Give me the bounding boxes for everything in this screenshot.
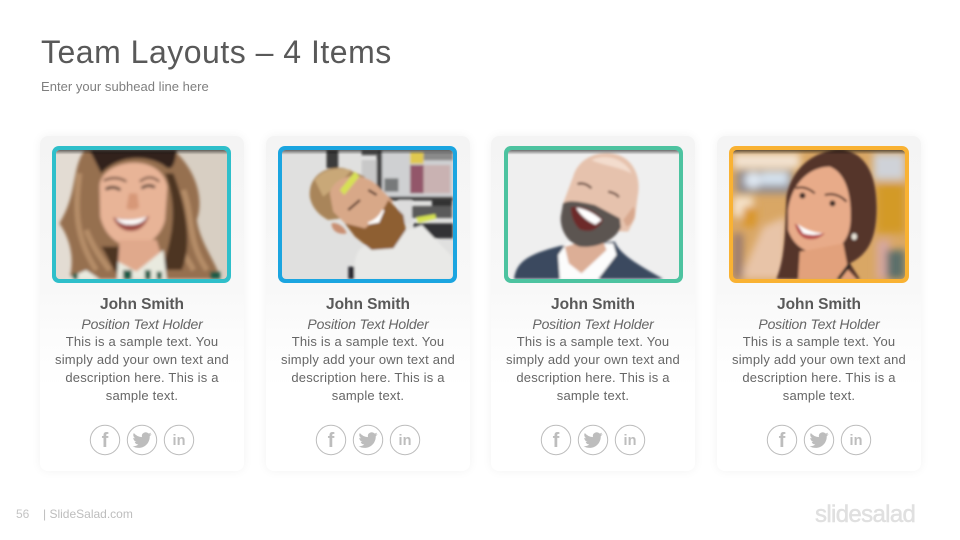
social icons (90, 424, 194, 456)
panel: team member 2 (266, 136, 470, 471)
social icons: in (399, 433, 411, 449)
social icons: in (624, 433, 636, 449)
panel: team member 3 (491, 136, 695, 471)
title: Team Layouts – 4 Items (41, 34, 392, 70)
name: John Smith (551, 296, 635, 313)
social icons: f (328, 430, 335, 452)
description: simply add your own text and (732, 352, 906, 367)
position: Position Text Holder (758, 316, 880, 332)
position: Position Text Holder (81, 316, 203, 332)
subhead: Enter your subhead line here (41, 79, 209, 94)
social icons (766, 424, 872, 456)
name: John Smith (326, 296, 410, 313)
social icons: f (553, 430, 560, 452)
description: This is a sample text. You (517, 334, 669, 349)
description: description here. This is a (516, 370, 670, 385)
description: sample text. (332, 388, 404, 403)
name: John Smith (100, 296, 184, 313)
description (506, 334, 680, 403)
description: This is a sample text. You (743, 334, 895, 349)
photo: laughing bearded man in office (278, 146, 457, 283)
social icons (540, 424, 646, 456)
description (55, 334, 229, 403)
description: sample text. (783, 388, 855, 403)
page number: 56 (16, 507, 29, 521)
photo: smiling woman with curly hair (52, 146, 231, 283)
social icons: f (102, 430, 109, 452)
panel: team member 1 (40, 136, 244, 471)
position: Position Text Holder (307, 316, 429, 332)
social icons: in (850, 433, 862, 449)
name: John Smith (777, 296, 861, 313)
description: description here. This is a (65, 370, 219, 385)
photo: laughing bald man in blazer (504, 146, 683, 283)
footer site name: | SlideSalad.com (43, 507, 133, 521)
description: simply add your own text and (281, 352, 455, 367)
social icons (316, 424, 420, 456)
description: This is a sample text. You (66, 334, 218, 349)
photo: smiling woman with blurred lights behind (729, 146, 909, 283)
logo: slidesalad (815, 501, 915, 528)
description: simply add your own text and (55, 352, 229, 367)
description: This is a sample text. You (292, 334, 444, 349)
description: sample text. (106, 388, 178, 403)
description: description here. This is a (291, 370, 445, 385)
description: sample text. (557, 388, 629, 403)
description: description here. This is a (742, 370, 896, 385)
panel: team member 4 (717, 136, 921, 471)
description: simply add your own text and (506, 352, 680, 367)
social icons: f (779, 430, 786, 452)
description (732, 334, 906, 403)
social icons: in (173, 433, 185, 449)
description (281, 334, 455, 403)
position: Position Text Holder (532, 316, 654, 332)
